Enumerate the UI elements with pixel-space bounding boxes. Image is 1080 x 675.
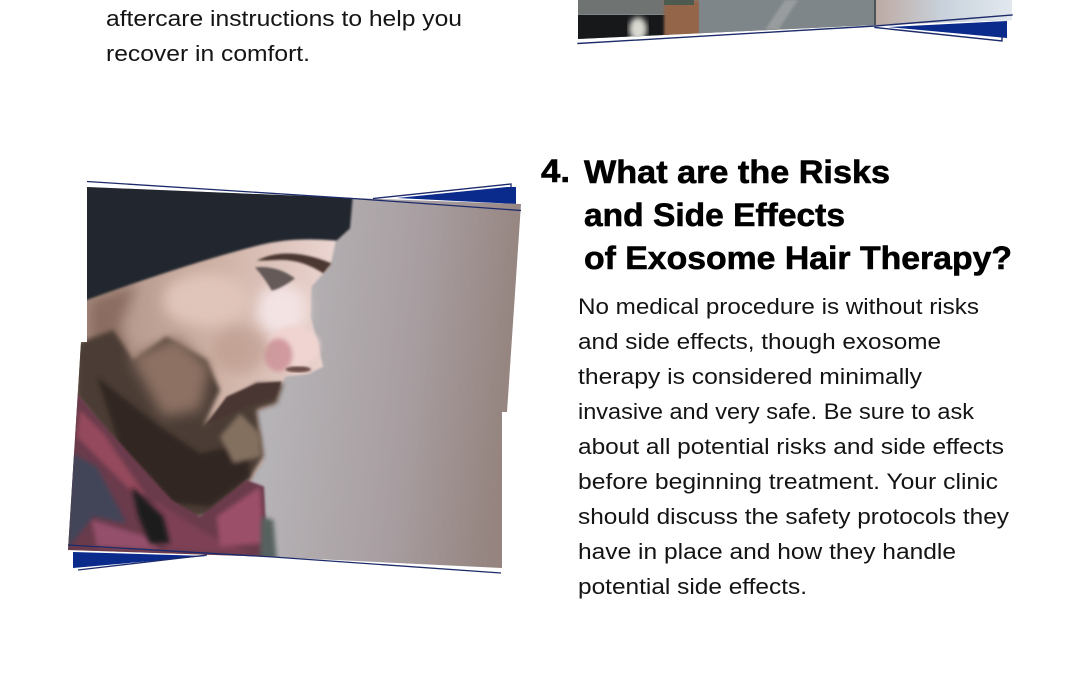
frame lines: top photo: [578, 15, 1012, 44]
body text: risks explanation: No medical procedure is without risks: [578, 294, 979, 319]
photo: man in beanie in profile with frame accents: [60, 170, 530, 580]
heading: risks and side effects: What are the Risks: [584, 154, 890, 190]
number: 4: 4.: [541, 153, 570, 189]
blue accent: bottom left of portrait: [73, 552, 207, 568]
photo: person in grey shirt: [578, 0, 1012, 43]
beard: [77, 330, 283, 520]
frame lines: portrait: [68, 182, 521, 573]
heading: risks and side effects: [584, 154, 1012, 276]
heading: risks and side effects: of Exosome Hair Therapy?: [584, 240, 1012, 276]
heading: risks and side effects: and Side Effects: [584, 197, 845, 233]
blue accent: top photo corner: [888, 21, 1007, 38]
body text: risks explanation: invasive and very safe. Be sure to ask: [578, 399, 975, 424]
face: [75, 238, 336, 481]
scarf: [60, 393, 267, 560]
text block: end of previous section: [106, 6, 462, 66]
nose shadow: [264, 338, 292, 372]
text block: end of previous section: recover in comfort.: [106, 41, 310, 66]
body text: risks explanation: about all potential risks and side effects: [578, 434, 1004, 459]
skin highlights: [163, 273, 250, 327]
side hair shading: [88, 283, 137, 357]
body text: risks explanation: potential side effects.: [578, 574, 807, 599]
eyebrow and eye: [257, 253, 332, 273]
body text: risks explanation: therapy is considered minimally: [578, 364, 923, 389]
body text: risks explanation: and side effects, though exosome: [578, 329, 941, 354]
text block: end of previous section: aftercare instructions to help you: [106, 6, 462, 31]
portrait image: [68, 187, 521, 568]
body text: risks explanation: before beginning treatment. Your clinic: [578, 469, 998, 494]
hat: [87, 187, 354, 302]
photo: cropped top image with frame accents: [578, 0, 1012, 44]
blue accent: top right of portrait: [397, 187, 516, 204]
body text: risks explanation: have in place and how they handle: [578, 539, 956, 564]
body text: risks explanation: should discuss the safety protocols they: [578, 504, 1010, 529]
body text: risks explanation: [578, 294, 1010, 599]
